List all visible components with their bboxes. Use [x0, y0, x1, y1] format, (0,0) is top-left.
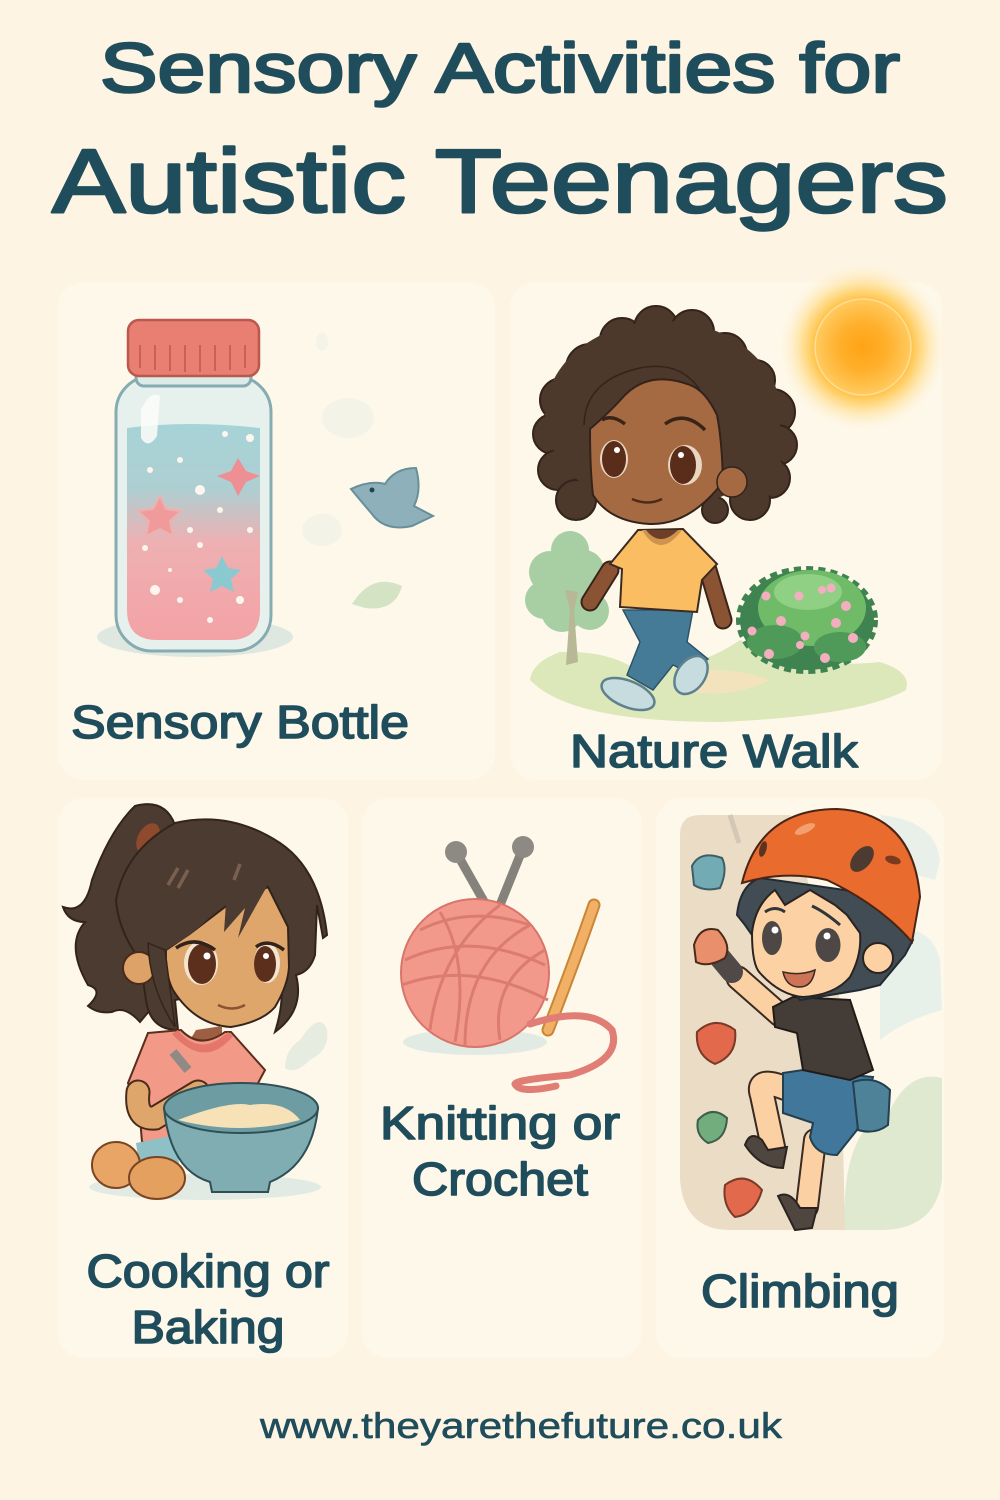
- ponytail: [63, 804, 175, 1022]
- label: nature walk: Nature Walk: [570, 725, 859, 777]
- legs: [136, 1135, 180, 1170]
- eggs: [92, 1142, 140, 1188]
- icon: faint leaf: [352, 582, 402, 609]
- panel: sensory bottle: [58, 282, 495, 780]
- hair: [533, 306, 797, 523]
- bangs: [150, 850, 275, 950]
- icon: tree: [525, 531, 609, 665]
- icon: sun: [777, 261, 949, 433]
- icon: climbing wall: [680, 815, 845, 1230]
- icon: sensory bottle jar: [97, 320, 293, 657]
- arm: [138, 1092, 198, 1118]
- faint smudges: [302, 333, 374, 546]
- icon: small blue bird: [351, 468, 433, 528]
- icon: flowering bush: [740, 570, 874, 670]
- footer: website: www.theyarethefuture.co.uk: [259, 1405, 783, 1446]
- label: cooking or baking: Baking: [132, 1301, 284, 1353]
- whisk: [173, 1052, 188, 1070]
- title: Sensory Activities for: [100, 29, 900, 107]
- label: cooking or baking: [86, 1245, 330, 1353]
- icon: ground: [530, 640, 907, 722]
- far leg: [807, 1140, 815, 1207]
- bowl: [164, 1108, 318, 1192]
- label: knitting or crochet: Knitting or: [380, 1097, 620, 1149]
- icon: girl with mixing bowl: [63, 804, 327, 1200]
- shirt: [128, 1030, 265, 1146]
- panel: nature walk: [510, 261, 949, 780]
- icon: walking teen: [533, 306, 797, 717]
- near leg: [761, 1084, 790, 1147]
- panel: knitting or crochet: [362, 798, 642, 1358]
- hair: [737, 878, 913, 1000]
- icon: yarn ball and needles: [401, 836, 614, 1090]
- label: cooking or baking: Cooking or: [86, 1245, 330, 1297]
- helmet: [742, 809, 920, 942]
- shirt: [773, 997, 873, 1080]
- icon: teen climber: [694, 809, 920, 1230]
- label: sensory bottle: Sensory Bottle: [71, 696, 409, 748]
- title: Autistic Teenagers: [52, 132, 948, 232]
- label: knitting or crochet: Crochet: [412, 1153, 588, 1205]
- arm: [738, 978, 780, 1015]
- label: knitting or crochet: [380, 1097, 620, 1205]
- label: climbing: Climbing: [701, 1265, 899, 1317]
- title: [52, 29, 948, 232]
- main hair: [116, 819, 327, 1032]
- panel: cooking or baking: [58, 798, 348, 1358]
- shorts: [783, 1070, 873, 1155]
- panel: climbing: [656, 798, 944, 1358]
- scene backdrop: [845, 815, 942, 1230]
- face: [752, 890, 860, 997]
